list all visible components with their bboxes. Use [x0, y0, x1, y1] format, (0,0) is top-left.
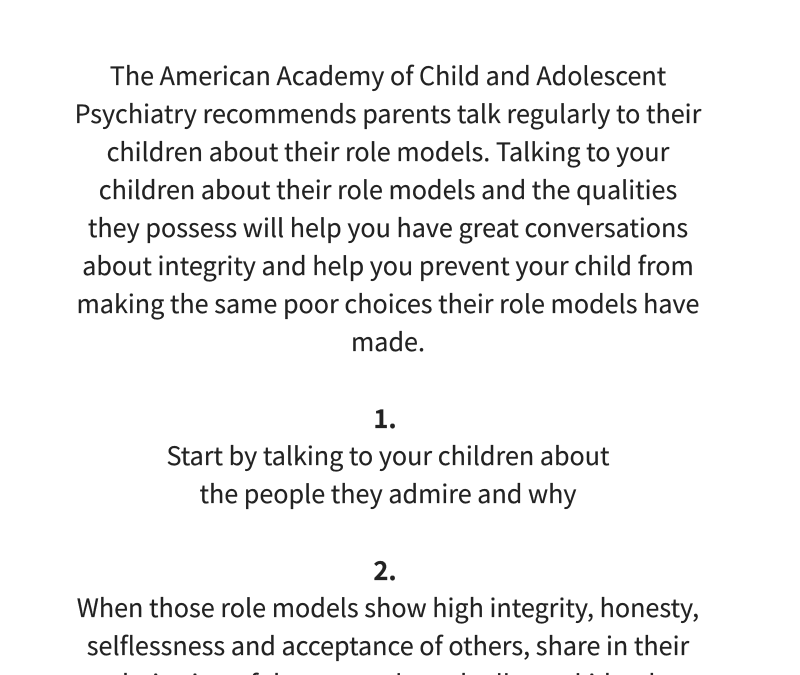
intro paragraph: about integrity and help you prevent your child from — [82, 247, 694, 283]
intro paragraph: children about their role models. Talking to your — [107, 133, 669, 169]
intro paragraph — [75, 57, 702, 359]
step 1 text: the people they admire and why — [199, 475, 577, 511]
intro paragraph: making the same poor choices their role models have — [77, 285, 699, 321]
intro paragraph: made. — [351, 323, 425, 359]
intro paragraph: they possess will help you have great conversations — [88, 209, 688, 245]
step 2 number: 2. — [373, 551, 397, 588]
step 1 text: Start by talking to your children about — [166, 437, 610, 473]
intro paragraph: The American Academy of Child and Adolescent — [110, 57, 666, 93]
step 2 text — [77, 589, 699, 675]
step 1 number: 1. — [373, 399, 397, 436]
step 2 text: When those role models show high integrity, honesty, — [77, 589, 699, 625]
intro paragraph: children about their role models and the qualities — [99, 171, 677, 207]
step 1 text — [166, 437, 610, 511]
step 2 text: selflessness and acceptance of others, share in their — [87, 627, 689, 663]
intro paragraph: Psychiatry recommends parents talk regularly to their — [75, 95, 701, 131]
